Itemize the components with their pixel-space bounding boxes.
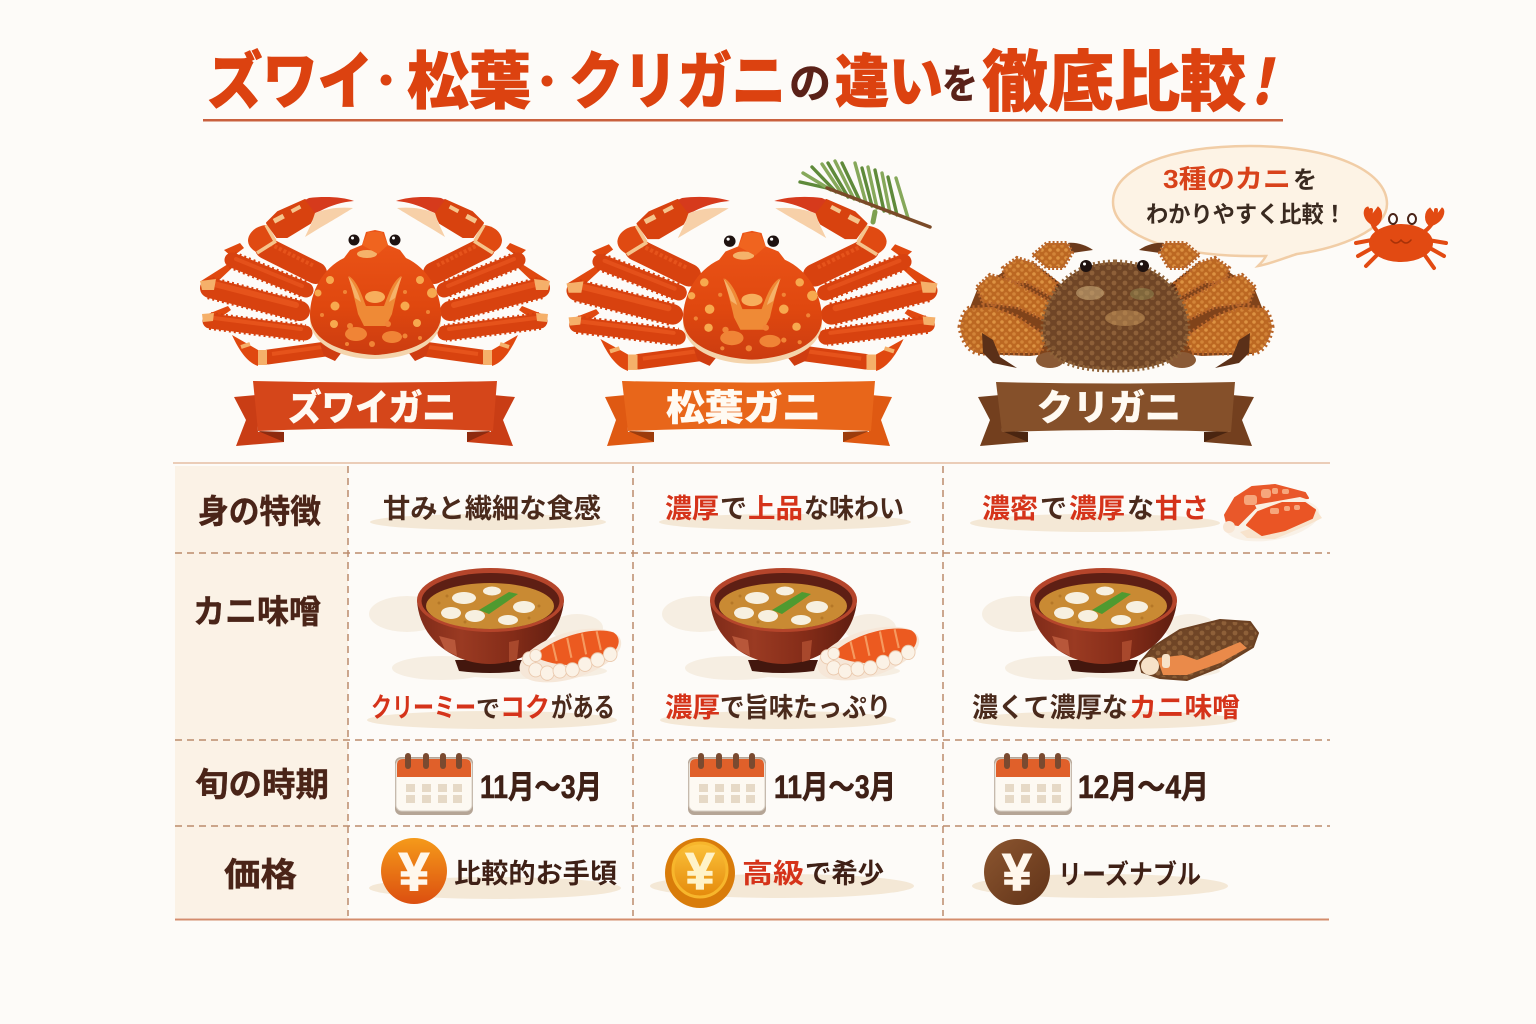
row1 kuri text [982, 494, 1209, 524]
row2 matsuba text: で旨味たっぷり [720, 693, 891, 723]
icon: small crab mascot [1356, 207, 1446, 268]
label: 身の特徴: 身の特徴 [198, 493, 321, 530]
row1 kuri text: 濃厚 [1069, 494, 1125, 524]
row4 matsuba price: で希少 [805, 859, 884, 889]
row1 matsuba text [665, 494, 904, 524]
row1 kuri text: で [1040, 494, 1067, 524]
row4 zuwai price: 比較的お手頃 [454, 859, 617, 889]
row1 kuri text: な [1127, 494, 1154, 524]
row2 matsuba text: 濃厚 [665, 693, 720, 723]
row3 zuwai season: 11月～3月 [480, 769, 602, 805]
row1 matsuba text: 濃厚 [665, 494, 719, 524]
row1 kuri text: 甘さ [1155, 494, 1209, 524]
comparison table [173, 463, 1330, 920]
row4 matsuba price: 高級 [742, 859, 804, 889]
row4 zuwai price: ¥ [399, 842, 429, 902]
row4 matsuba price: ¥ [686, 843, 715, 901]
row2 zuwai text [371, 692, 615, 723]
crab: ズワイガニ [200, 197, 550, 366]
row4 kuri price: リーズナブル [1058, 859, 1201, 890]
label: 旬の時期: 旬の時期 [195, 766, 329, 803]
banner: クリガニ [978, 382, 1254, 446]
row1 zuwai text: 甘みと繊細な食感 [383, 494, 601, 524]
row1 kuri text: 濃密 [982, 494, 1038, 524]
row3 matsuba season: 11月～3月 [774, 769, 896, 805]
speech bubble: わかりやすく比較！ [1146, 201, 1346, 227]
title: ！ [1236, 49, 1286, 118]
icon: miso bowl 2 [662, 568, 925, 691]
row4 kuri price: ¥ [1003, 844, 1032, 902]
title: 徹底比較 [982, 45, 1246, 119]
row2 zuwai text: がある [551, 692, 615, 723]
label: カニ味噌: カニ味噌 [193, 593, 321, 630]
title: 松葉 [407, 48, 531, 117]
icon: miso bowl 3 [982, 568, 1258, 680]
banner: 松葉ガニ [605, 381, 892, 446]
speech bubble [1113, 146, 1387, 266]
speech bubble: 3種のカニ [1163, 164, 1291, 194]
row2 zuwai text: コク [500, 693, 550, 723]
row1 matsuba text: で [720, 494, 747, 524]
row2 kuri text: カニ味噌 [1129, 693, 1240, 723]
icon: crab meat sushi [1221, 485, 1323, 548]
banner: ズワイガニ: ズワイガニ [288, 387, 456, 428]
row4 zuwai price [381, 838, 617, 904]
speech bubble: を [1293, 167, 1317, 194]
row2 zuwai text: で [476, 696, 500, 723]
row3 matsuba season [688, 753, 896, 815]
row3 zuwai season [395, 753, 602, 815]
row4 matsuba price [665, 838, 884, 908]
highlight blobs [367, 514, 1237, 899]
title: の [789, 60, 831, 107]
row3 kuri season [994, 753, 1209, 815]
crab: 松葉ガニ [566, 197, 937, 371]
label: 価格: 価格 [224, 856, 297, 893]
crab: クリガニ [960, 243, 1272, 370]
row4 kuri price [984, 839, 1201, 905]
title: を [942, 63, 978, 107]
title underline [203, 119, 1283, 122]
icon: pine branch [800, 161, 930, 227]
title [207, 45, 1286, 119]
row3 kuri season: 12月～4月 [1078, 769, 1209, 805]
icon: miso bowl 1 [369, 568, 627, 693]
banner: 松葉ガニ: 松葉ガニ [666, 387, 821, 428]
row label column background [175, 466, 348, 918]
row1 matsuba text: な味わい [804, 494, 904, 524]
row2 kuri text: 濃くて濃厚な [972, 693, 1128, 723]
title: 違い [835, 50, 943, 115]
banner: クリガニ: クリガニ [1037, 387, 1181, 428]
row2 kuri text [972, 693, 1240, 723]
row2 zuwai text: クリーミー [371, 693, 476, 723]
banner: ズワイガニ [234, 381, 515, 446]
title: ズワイ [207, 47, 373, 117]
title: クリガニ [569, 48, 786, 117]
row1 matsuba text: 上品 [748, 494, 803, 524]
